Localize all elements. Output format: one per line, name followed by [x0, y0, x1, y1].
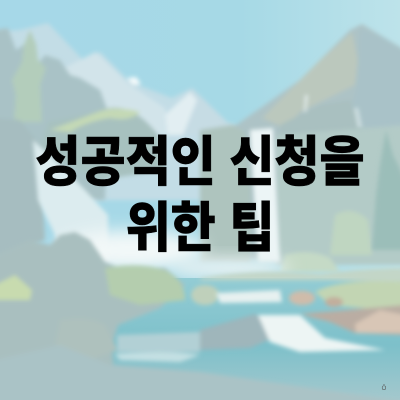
mist [55, 230, 205, 270]
foreground left bushes [0, 232, 400, 400]
far bank and right bank [191, 268, 400, 335]
waterfalls [33, 95, 308, 262]
water [0, 278, 400, 400]
title line 1: 성공적인 신청을 [35, 133, 365, 193]
sky [0, 0, 400, 280]
small credit mark: Ô [382, 385, 387, 392]
right pine tree [372, 130, 400, 250]
cascades [115, 290, 385, 362]
title line 2: 위한 팁 [126, 199, 274, 259]
left forest [0, 28, 400, 272]
mountains [0, 23, 400, 260]
